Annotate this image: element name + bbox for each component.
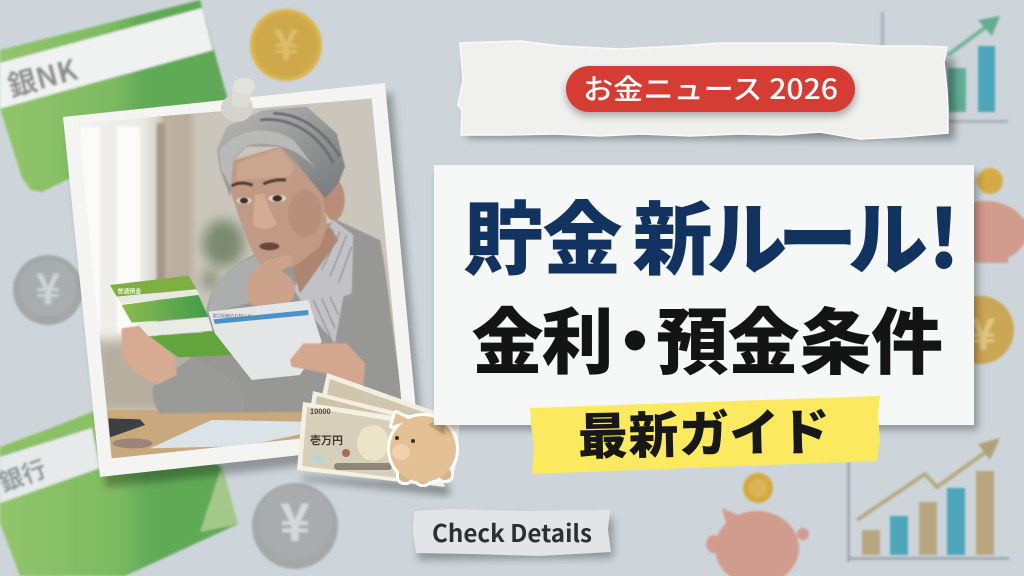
yen bills and piggy bank [297, 373, 460, 496]
table [106, 410, 302, 458]
tag: check details: Check Details [432, 514, 592, 549]
document [208, 300, 322, 380]
coin: gold right [946, 296, 1014, 364]
pushpin [221, 78, 255, 122]
coins [113, 438, 153, 448]
neck [290, 227, 338, 293]
main title panel [434, 165, 978, 430]
piggy bank: right [943, 168, 1024, 263]
coin: gold top [250, 9, 322, 81]
piggy [390, 413, 456, 484]
coin: gold top: ¥ [274, 12, 299, 73]
yellow tape: latest guide [530, 392, 880, 474]
plant [202, 220, 244, 290]
hand right [290, 343, 365, 388]
photo of man with passbook [63, 83, 424, 487]
coin: gray bottom [252, 481, 338, 569]
yen bills and piggy bank: 壱万円 [310, 432, 343, 448]
heading: savings new rules: 貯金 新ルール! [464, 176, 960, 292]
shirt [293, 220, 353, 343]
tag: check details [413, 509, 613, 560]
passbook [110, 276, 197, 297]
man figure [153, 107, 403, 413]
coin: gold right: ¥ [970, 299, 996, 363]
photo of man with passbook: 普通預金 [117, 286, 141, 295]
front bill [297, 402, 445, 487]
card: bank book top left: 銀NK [2, 47, 82, 106]
card: bank book top left [0, 0, 228, 192]
badge: お金ニュース 2026: お金ニュース 2026 [583, 68, 838, 108]
yen bills and piggy bank: 10000 [310, 407, 331, 417]
ear [323, 179, 345, 221]
hair [217, 107, 345, 198]
badge: お金ニュース 2026 [566, 66, 856, 116]
paper on table [150, 420, 302, 448]
piggy bank: bottom with coin [706, 473, 809, 576]
photo background [77, 97, 403, 463]
calculator [108, 418, 145, 437]
chart: bottom right [847, 438, 1009, 562]
photo frame [63, 83, 419, 477]
coin: gray bottom: ¥ [280, 481, 310, 556]
yellow tape: latest guide: 最新ガイド [577, 392, 831, 470]
card: bank book bottom left [0, 412, 238, 576]
hand at chin [246, 255, 295, 307]
heading: interest and deposit terms: 金利・預金条件 [472, 284, 943, 389]
face [230, 147, 327, 267]
coin: gray left: ¥ [36, 256, 61, 317]
photo of man with passbook: 取引明細のお知らせ [213, 312, 252, 319]
eyes [237, 197, 251, 204]
back bills [310, 373, 460, 470]
hand left [122, 325, 177, 385]
brows [232, 180, 286, 186]
torn paper strip [458, 41, 955, 140]
mouth [259, 242, 279, 250]
coin: gray left [13, 255, 83, 325]
nose [253, 193, 277, 229]
chart: top right [881, 12, 1008, 123]
sweater [153, 220, 403, 413]
